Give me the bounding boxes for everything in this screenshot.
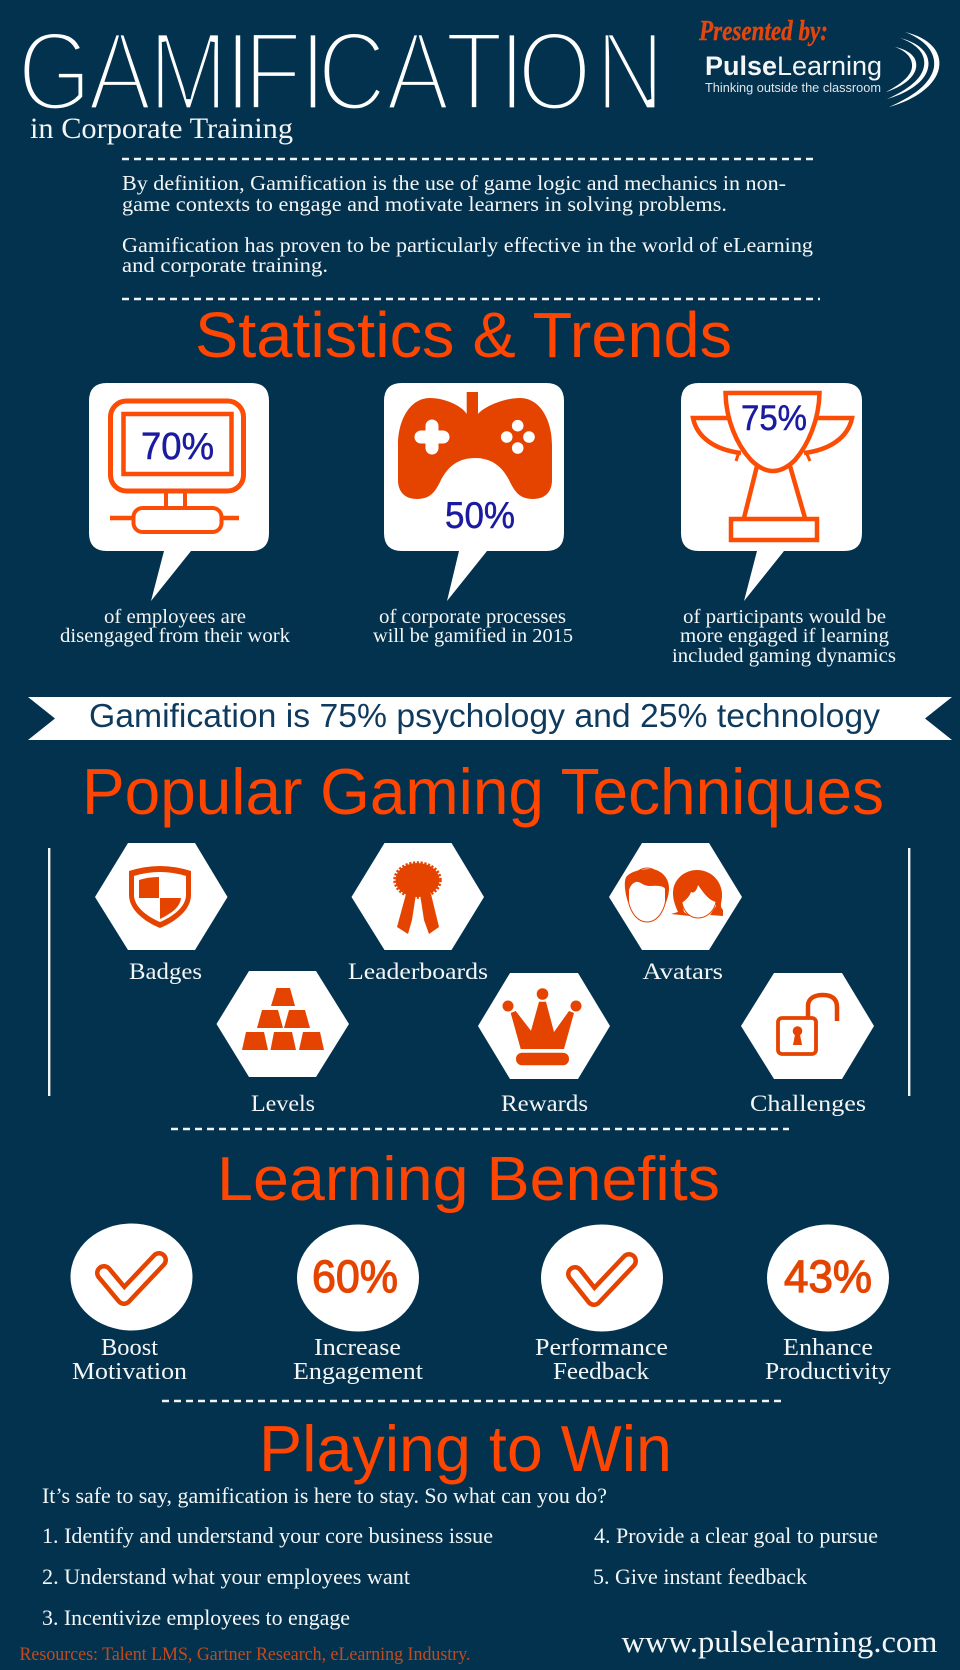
caption: disengaged from their work <box>60 625 290 647</box>
hexagon <box>609 843 742 950</box>
tip 5: 5. Give instant feedback <box>593 1564 807 1589</box>
label <box>535 1335 668 1385</box>
caption: of corporate processes <box>379 606 566 628</box>
resources footnote: Resources: Talent LMS, Gartner Research, eLearning Industry. <box>20 1645 470 1665</box>
tip 4: 4. Provide a clear goal to pursue <box>594 1523 878 1548</box>
icon: crown <box>502 988 582 1065</box>
closing text block <box>42 1483 878 1630</box>
label: Feedback <box>553 1359 649 1385</box>
stat: 43% <box>784 1251 872 1302</box>
caption: of participants would be <box>683 606 886 628</box>
label: Leaderboards <box>348 959 488 984</box>
female avatar <box>671 870 723 918</box>
label <box>293 1335 423 1385</box>
icon: ribbon rosette <box>394 862 440 934</box>
label: Engagement <box>293 1359 423 1385</box>
caption: of employees are <box>104 606 246 628</box>
technique: levels <box>216 971 349 1116</box>
heading: learning benefits: Learning Benefits <box>217 1145 720 1214</box>
stat: 60% <box>312 1251 398 1302</box>
icon: stacked gold bars <box>242 988 324 1050</box>
presented by label: Presented by: <box>698 16 828 47</box>
badge <box>297 1224 419 1332</box>
intro paragraph: Gamification has proven to be particularly effective in the world of eLearning <box>122 233 814 257</box>
hexagon <box>216 971 349 1077</box>
label: Increase <box>314 1335 401 1361</box>
icon: avatars <box>625 868 723 922</box>
speech bubble <box>681 383 862 601</box>
stat panel: 70% <box>60 383 290 647</box>
icon: check mark <box>575 1261 629 1298</box>
icon: game controller <box>398 392 552 499</box>
caption: included gaming dynamics <box>672 645 896 667</box>
website url: www.pulselearning.com <box>622 1624 938 1659</box>
technique: leaderboards <box>348 843 488 984</box>
benefit: performance feedback <box>535 1224 668 1385</box>
label: Performance <box>535 1335 668 1361</box>
badge <box>541 1224 663 1332</box>
icon: shield <box>129 866 191 928</box>
divider <box>171 1128 789 1130</box>
technique: badges <box>95 843 228 984</box>
divider <box>162 1400 781 1402</box>
male avatar <box>625 868 669 922</box>
tip 3: 3. Incentivize employees to engage <box>42 1605 350 1630</box>
stat number: 50% <box>445 495 515 536</box>
technique: challenges <box>741 973 874 1116</box>
icon: open padlock <box>778 995 837 1054</box>
divider <box>122 158 813 160</box>
caption <box>60 606 290 647</box>
benefit: enhance productivity <box>765 1224 891 1385</box>
label: Levels <box>251 1091 315 1116</box>
hexagon <box>352 843 484 950</box>
icon: trophy <box>693 393 852 540</box>
heading: statistics and trends: Statistics & Trends <box>195 299 732 371</box>
stat number: 70% <box>141 426 214 468</box>
hexagon <box>95 843 228 950</box>
technique: rewards <box>478 973 610 1116</box>
label: Rewards <box>501 1091 588 1116</box>
label: Badges <box>129 959 202 984</box>
divider <box>122 298 820 300</box>
icon: computer monitor <box>110 401 244 532</box>
caption: will be gamified in 2015 <box>373 625 573 647</box>
label: Motivation <box>72 1359 187 1385</box>
technique: avatars <box>609 843 742 984</box>
stat number: 75% <box>741 399 807 438</box>
caption: more engaged if learning <box>680 625 889 647</box>
intro paragraph: game contexts to engage and motivate learners in solving problems. <box>122 192 727 216</box>
intro paragraph: and corporate training. <box>122 253 328 277</box>
speech bubble <box>384 383 564 601</box>
badge <box>767 1224 889 1332</box>
frame line left <box>48 848 50 1096</box>
stat panel: 50% <box>373 383 573 647</box>
logo arcs <box>886 32 939 107</box>
frame line right <box>908 848 910 1096</box>
intro paragraph: By definition, Gamification is the use of game logic and mechanics in non- <box>122 171 786 195</box>
badge <box>70 1224 192 1330</box>
logo tagline: Thinking outside the classroom <box>705 81 881 95</box>
label: Avatars <box>642 959 723 984</box>
speech bubble <box>89 383 269 601</box>
label: Challenges <box>750 1091 866 1116</box>
benefit: boost motivation <box>70 1224 192 1385</box>
tip 1: 1. Identify and understand your core business issue <box>42 1523 493 1548</box>
logo wordmark: PulseLearning <box>705 51 882 81</box>
label <box>72 1335 187 1385</box>
hexagon <box>741 973 874 1079</box>
label <box>765 1335 891 1385</box>
intro paragraph <box>122 171 814 277</box>
presenter logo <box>698 16 939 107</box>
caption <box>672 606 896 667</box>
label: Boost <box>101 1335 158 1361</box>
label: Enhance <box>783 1335 873 1361</box>
ribbon banner: Gamification is 75% psychology and 25% technology <box>89 697 880 734</box>
heading: popular gaming techniques: Popular Gaming Techniques <box>82 755 884 828</box>
tip 2: 2. Understand what your employees want <box>42 1564 410 1589</box>
benefit: increase engagement <box>293 1224 423 1385</box>
label: Productivity <box>765 1359 891 1385</box>
icon: check mark <box>104 1260 159 1297</box>
title: GAMIFICATION <box>18 10 664 135</box>
subtitle: in Corporate Training <box>30 112 293 145</box>
heading: playing to win: Playing to Win <box>259 1412 672 1485</box>
caption <box>373 606 573 647</box>
lead sentence: It’s safe to say, gamification is here to stay. So what can you do? <box>42 1483 607 1508</box>
stat panel: 75% <box>672 383 896 667</box>
hexagon <box>478 973 610 1079</box>
